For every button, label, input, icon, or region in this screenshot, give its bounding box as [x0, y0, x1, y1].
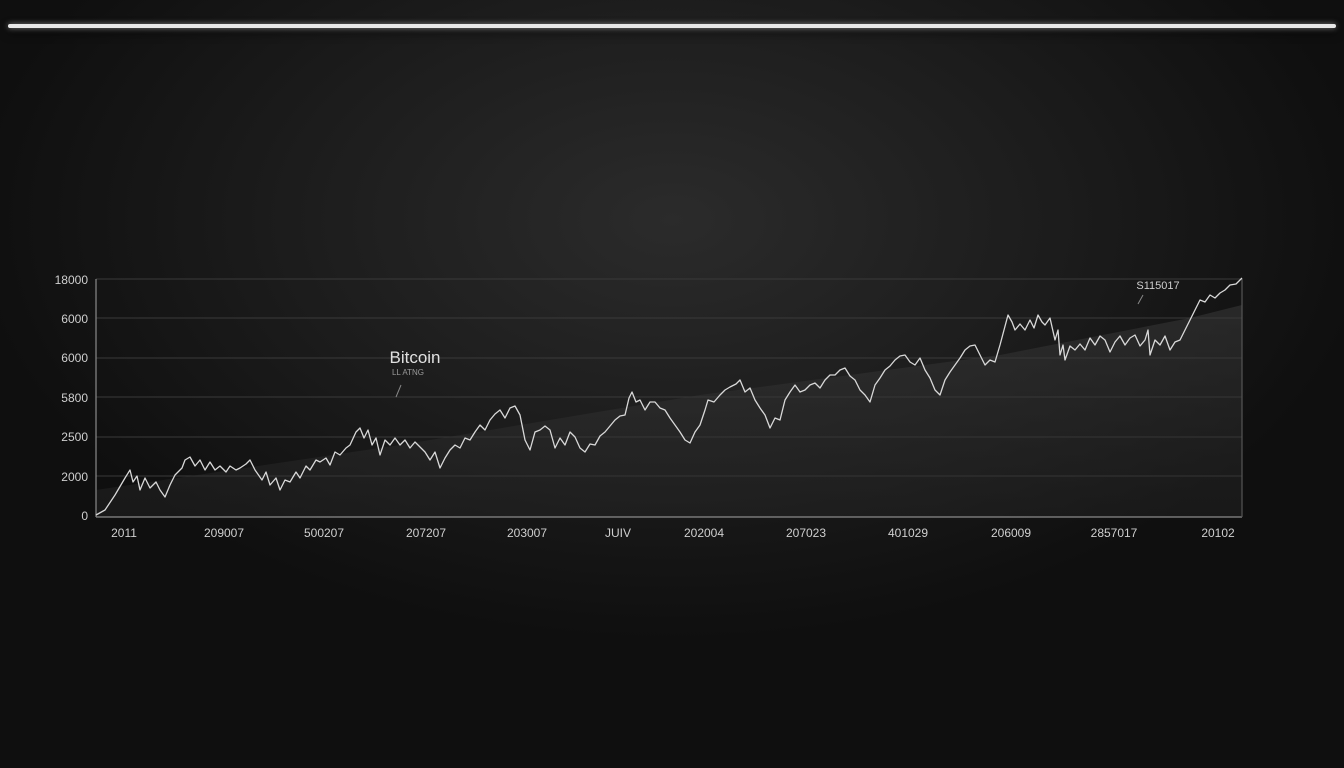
- y axis labels: 18000: [55, 273, 88, 287]
- annotation: Bitcoin: LL ATNG: [392, 368, 424, 377]
- axes: [96, 279, 1242, 517]
- annotation: peak value: S115017: [1136, 280, 1180, 292]
- top glowing rule: [8, 24, 1336, 28]
- x axis labels: 206009: [991, 526, 1031, 540]
- x axis labels: JUIV: [605, 526, 631, 540]
- x axis labels: 202004: [684, 526, 724, 540]
- y axis labels: 2000: [61, 470, 88, 484]
- annotation: Bitcoin: Bitcoin: [389, 348, 441, 367]
- y axis labels: 2500: [61, 430, 88, 444]
- shaded trend area: [96, 305, 1242, 517]
- x axis labels: [111, 526, 1235, 540]
- x axis labels: 207207: [406, 526, 446, 540]
- x axis labels: 20102: [1201, 526, 1235, 540]
- annotation: peak value: [1136, 280, 1180, 304]
- x axis labels: 209007: [204, 526, 244, 540]
- x axis labels: 2857017: [1091, 526, 1138, 540]
- y axis labels: 0: [81, 509, 88, 523]
- y axis labels: 6000: [61, 312, 88, 326]
- x axis labels: 401029: [888, 526, 928, 540]
- x axis labels: 2011: [111, 526, 137, 540]
- x axis labels: 207023: [786, 526, 826, 540]
- y axis labels: 6000: [61, 351, 88, 365]
- x axis labels: 203007: [507, 526, 547, 540]
- y axis labels: [55, 273, 88, 523]
- y axis labels: 5800: [61, 391, 88, 405]
- price line: [96, 278, 1242, 515]
- x axis labels: 500207: [304, 526, 344, 540]
- annotation: Bitcoin: [389, 348, 441, 397]
